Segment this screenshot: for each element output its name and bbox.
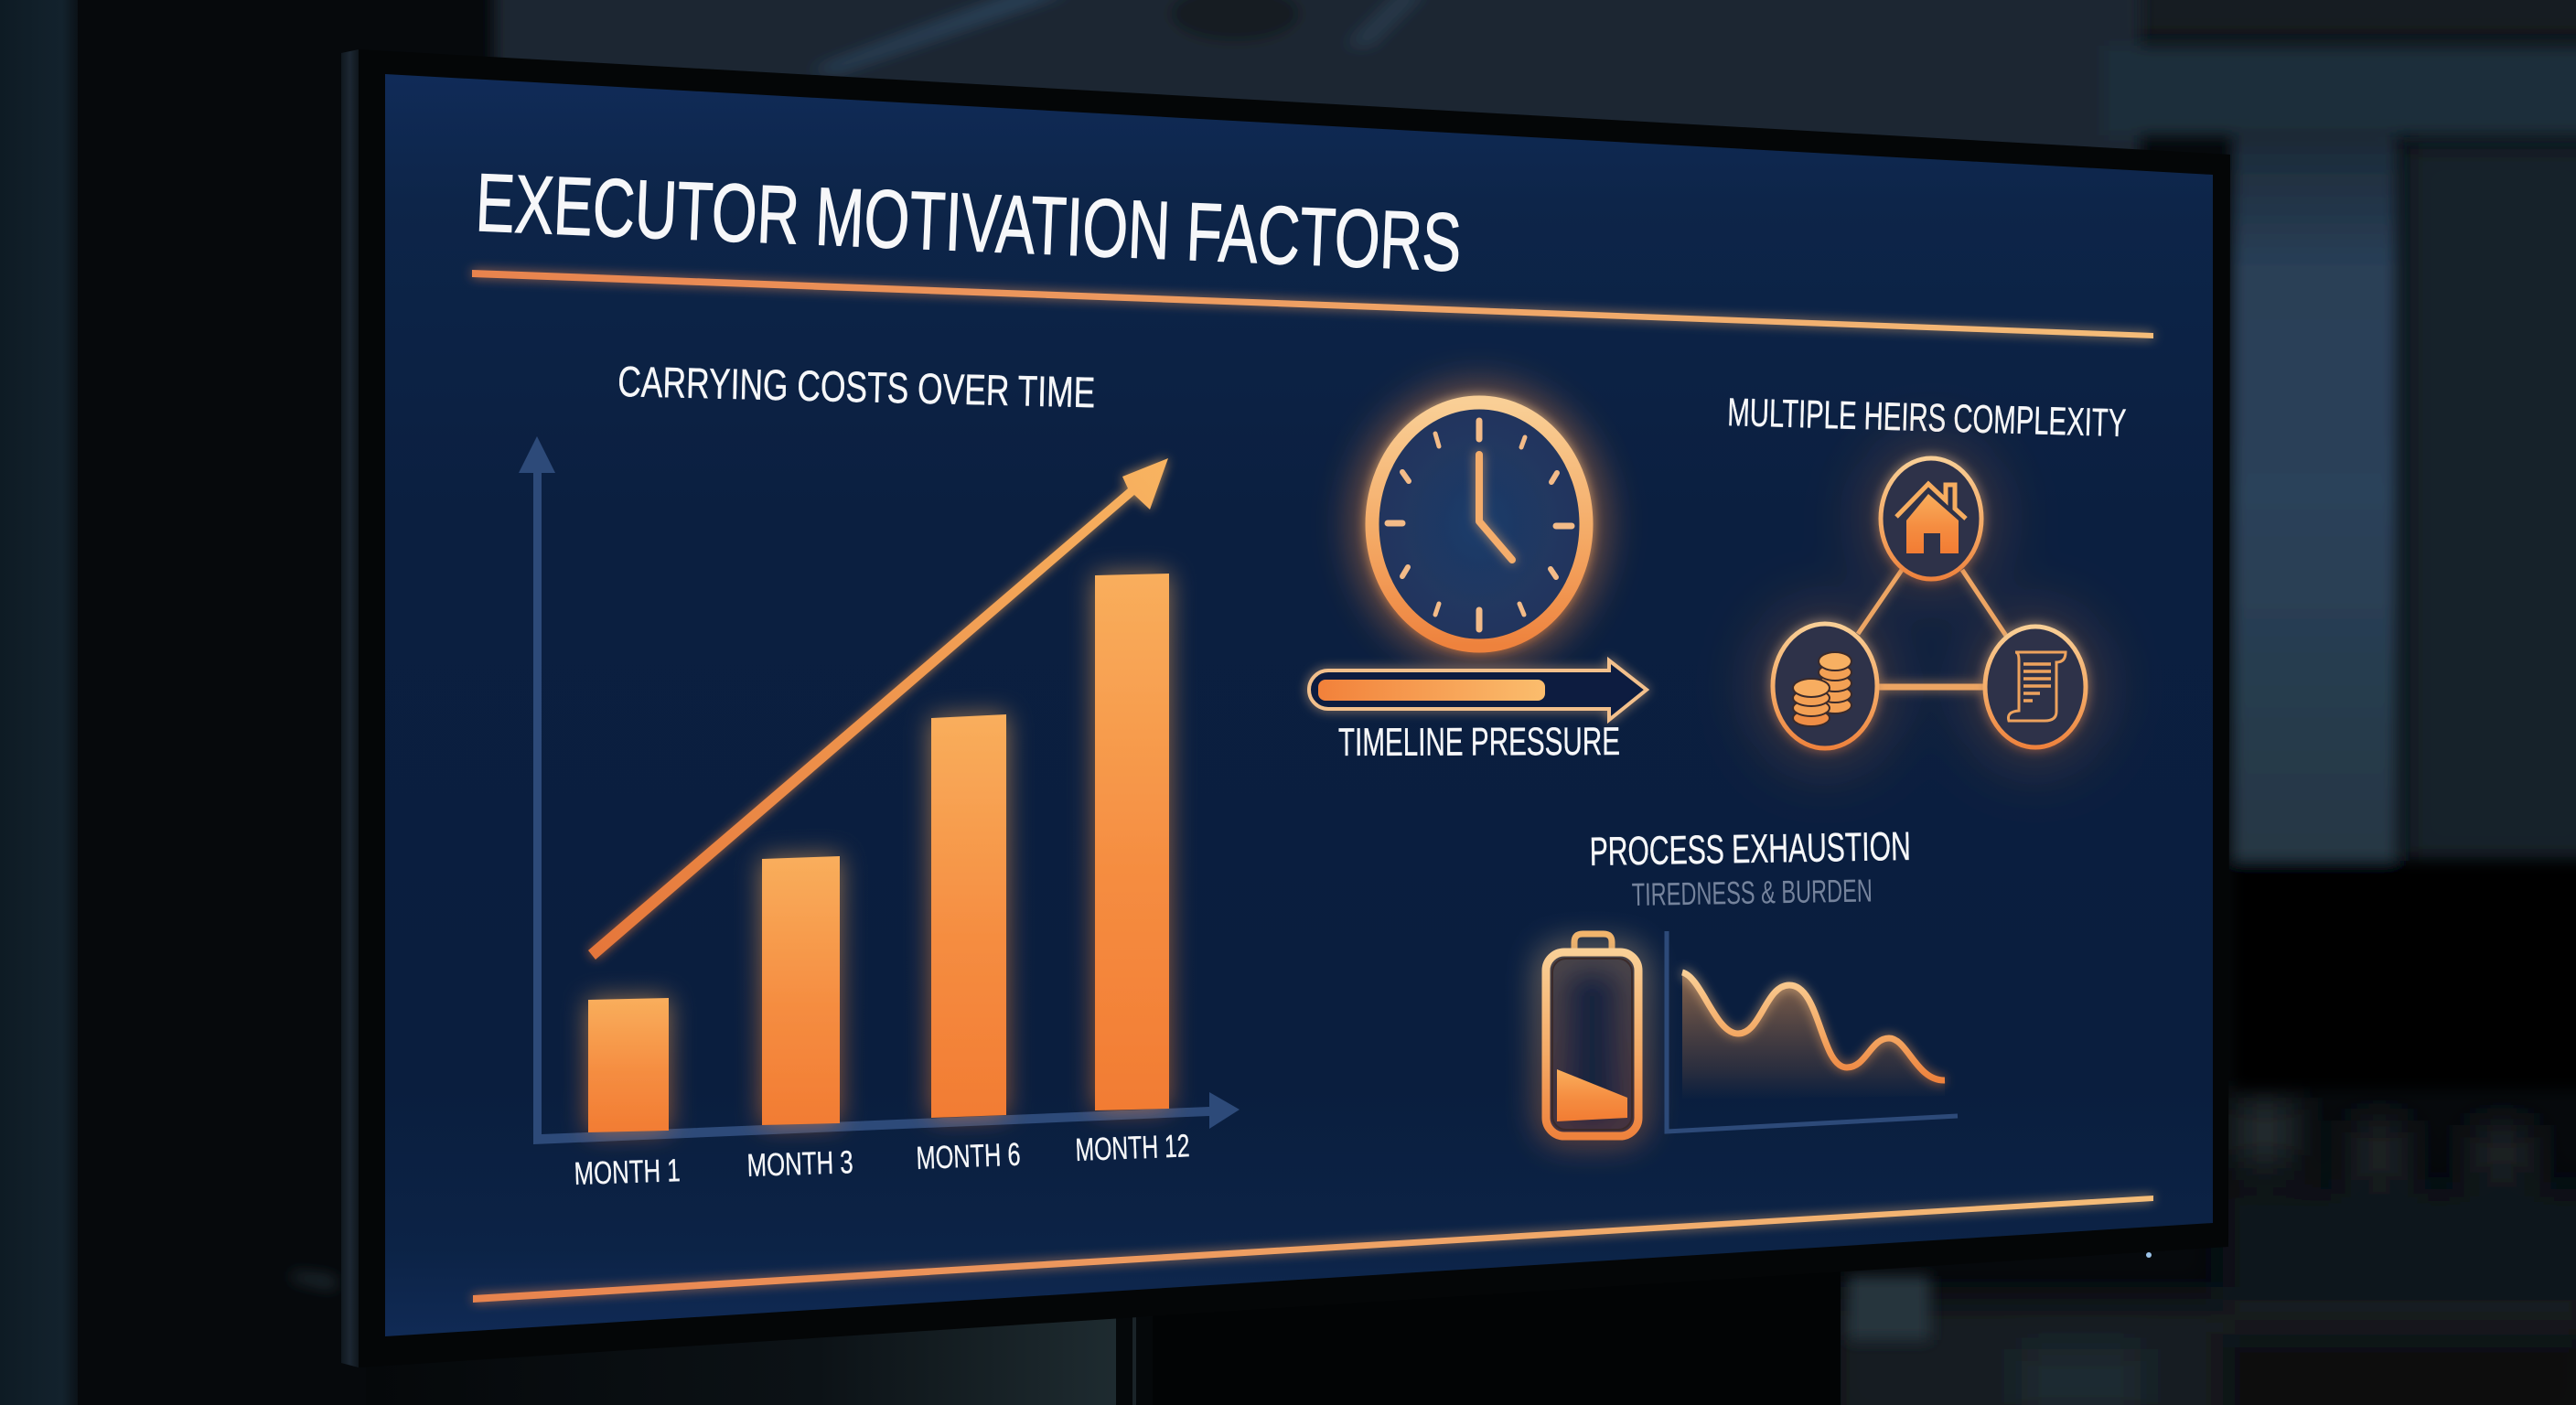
connector lines xyxy=(1858,570,2006,687)
subheading: TIREDNESS & BURDEN xyxy=(1631,873,1873,913)
icon: scroll xyxy=(2008,652,2066,721)
node: house xyxy=(1881,458,1981,579)
month labels: MONTH 6 xyxy=(916,1137,1021,1176)
icon: timeline progress arrow xyxy=(1309,660,1647,720)
panel: timeline pressure xyxy=(1309,382,1647,765)
top divider rule xyxy=(472,270,2153,338)
monitor bezel xyxy=(341,49,2230,1367)
screen panel xyxy=(385,74,2213,1336)
bar: month 3 xyxy=(762,856,840,1125)
panel: multiple heirs complexity xyxy=(1727,391,2127,763)
chart heading: CARRYING COSTS OVER TIME xyxy=(617,357,1096,416)
icon: low battery xyxy=(1546,934,1638,1136)
heading: PROCESS EXHAUSTION xyxy=(1589,824,1911,874)
energy line chart xyxy=(1667,931,1958,1132)
title: EXECUTOR MOTIVATION FACTORS xyxy=(474,157,1463,289)
node: document scroll xyxy=(1985,627,2086,747)
month labels xyxy=(574,1128,1190,1192)
month labels: MONTH 1 xyxy=(574,1153,681,1192)
bottom divider rule xyxy=(473,1196,2153,1303)
bar: month 12 xyxy=(1095,574,1169,1110)
icon: clock xyxy=(1372,402,1586,646)
label: timeline pressure: TIMELINE PRESSURE xyxy=(1338,720,1620,765)
icon: house xyxy=(1896,484,1966,553)
clock halo glow xyxy=(1351,382,1607,666)
node: coins xyxy=(1773,624,1877,748)
trend arrow xyxy=(588,458,1168,960)
bar: month 1 xyxy=(588,998,669,1132)
bar: month 6 xyxy=(931,714,1006,1118)
network halo glow xyxy=(1759,444,2099,763)
month labels: MONTH 3 xyxy=(746,1144,853,1184)
month labels: MONTH 12 xyxy=(1075,1128,1190,1168)
panel: carrying costs bar chart xyxy=(519,357,1240,1192)
panel: process exhaustion xyxy=(1546,824,1958,1136)
chart axes xyxy=(519,436,1240,1144)
clock hands xyxy=(1479,455,1512,560)
icon: coin stacks xyxy=(1793,652,1852,726)
heading: MULTIPLE HEIRS COMPLEXITY xyxy=(1727,391,2127,445)
